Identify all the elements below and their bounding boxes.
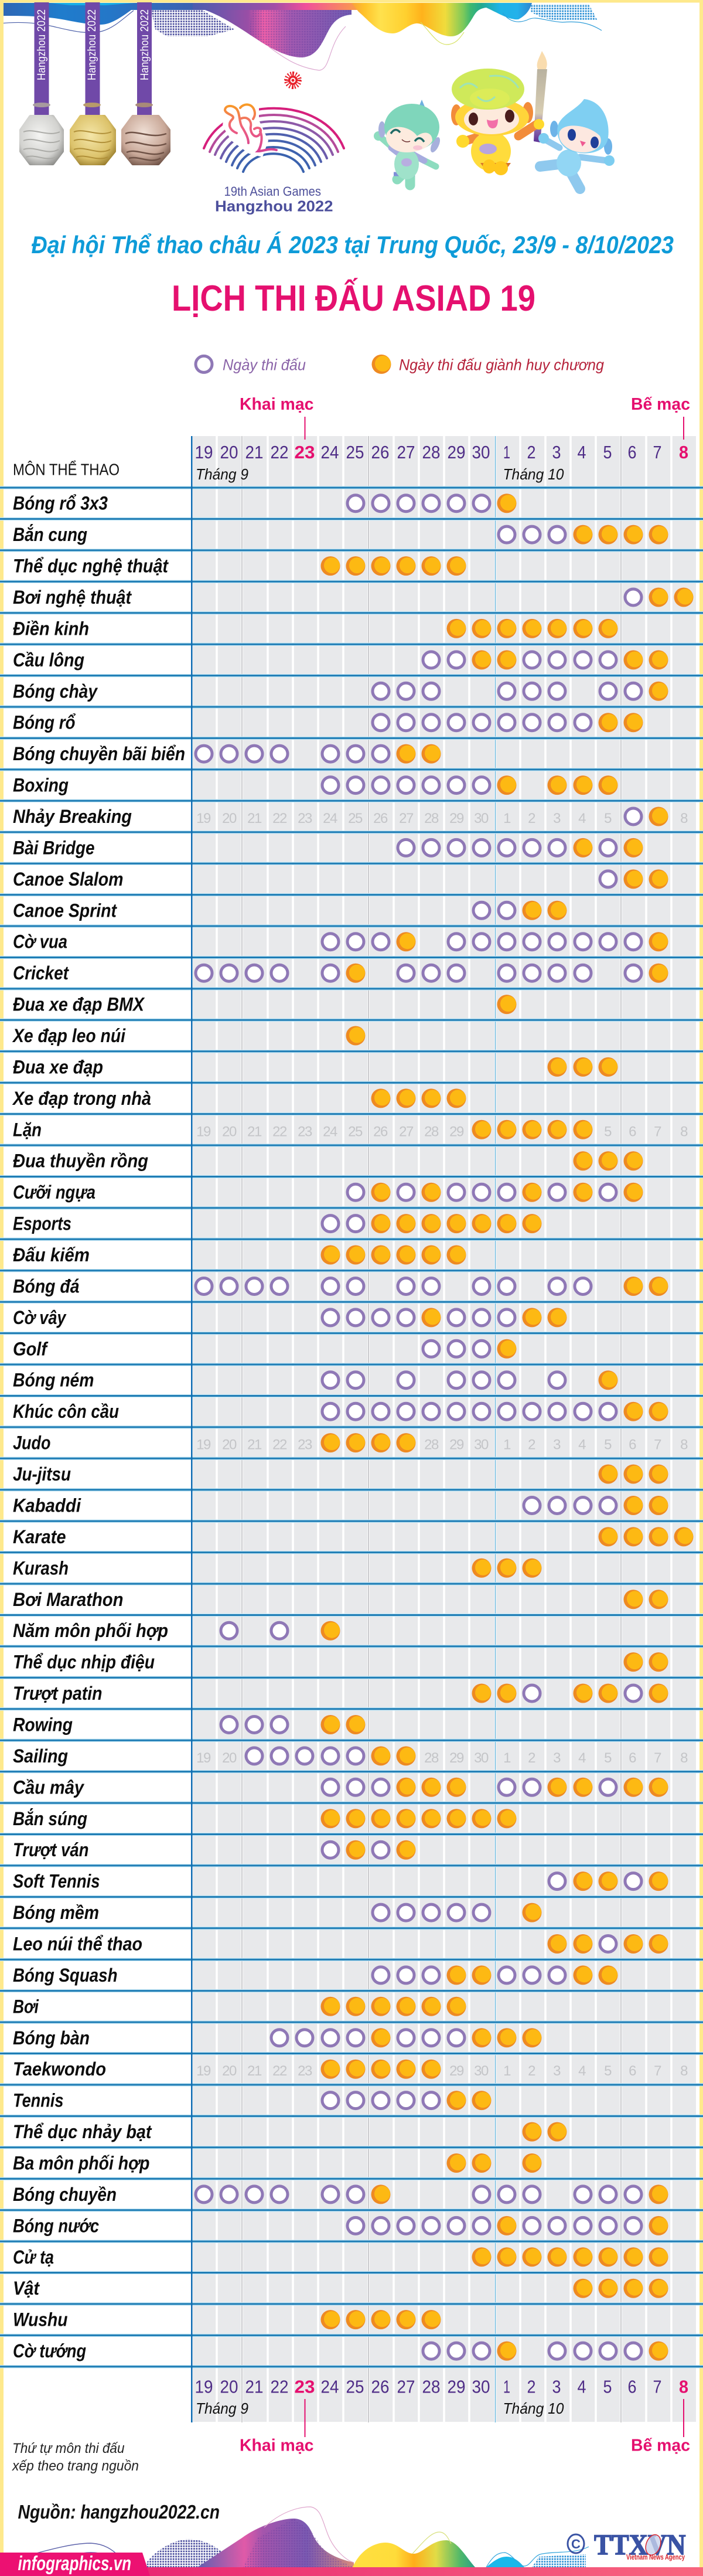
row: Judo: 4	[578, 1437, 586, 1453]
row: Nhảy Breaking: 22	[272, 811, 287, 826]
row: Bóng rổ 3x3: Bóng rổ 3x3	[13, 493, 108, 514]
row: Bóng chày	[13, 680, 668, 702]
marker: opening ceremony top: Khai mạc	[240, 395, 314, 414]
bottom date axis: 6	[628, 2377, 636, 2397]
row: Lặn: 6	[629, 1124, 636, 1139]
row: Xe đạp leo núi	[12, 1025, 365, 1046]
bottom date axis: 30	[472, 2377, 490, 2397]
row: Bóng chuyền: Bóng chuyền	[13, 2184, 117, 2205]
row: Nhảy Breaking: 21	[247, 811, 262, 826]
row: Sailing: 1	[503, 1750, 511, 1766]
row: Đua xe đạp BMX: Đua xe đạp BMX	[13, 994, 145, 1015]
row: Đấu kiếm	[13, 1244, 466, 1265]
row: Judo	[13, 1432, 688, 1454]
row: Thể dục nhảy bạt: Thể dục nhảy bạt	[13, 2121, 152, 2142]
row: Bắn súng	[13, 1808, 517, 1829]
row: Nhảy Breaking: 28	[424, 811, 439, 826]
mascots	[374, 51, 615, 189]
row: Cờ tướng	[13, 2340, 668, 2361]
row: Judo: Judo	[13, 1432, 50, 1454]
top date axis: 1	[503, 442, 510, 462]
Asian Games logo	[204, 103, 344, 172]
top date axis: 26	[371, 442, 389, 462]
row: Taekwondo: 21	[247, 2063, 262, 2079]
row: Thể dục nghệ thuật	[13, 556, 466, 577]
row: Sailing: 5	[604, 1750, 612, 1766]
logo caption: Hangzhou 2022	[215, 198, 333, 215]
mascot: yellow with torch	[451, 51, 547, 175]
legend: medal day: Ngày thi đấu giành huy chương	[399, 356, 604, 373]
row: Bơi nghệ thuật	[13, 587, 694, 608]
row: Sailing: Sailing	[13, 1745, 68, 1767]
top date axis: 22	[271, 442, 288, 462]
top date axis: Tháng 10	[503, 465, 564, 483]
row: Bắn cung	[13, 524, 668, 545]
row: Rowing	[13, 1714, 366, 1735]
row: Judo: 20	[222, 1437, 237, 1453]
row: Sailing: 3	[553, 1750, 561, 1766]
row: Judo: 6	[629, 1437, 636, 1453]
row: Thể dục nhảy bạt	[13, 2121, 567, 2142]
row: Kurash	[13, 1557, 541, 1578]
row: Năm môn phối hợp	[13, 1620, 340, 1641]
row: Taekwondo: 1	[503, 2063, 511, 2079]
bottom date axis: 7	[653, 2377, 662, 2397]
row: Esports: Esports	[13, 1213, 71, 1234]
row: Cờ tướng: Cờ tướng	[13, 2340, 86, 2361]
marker: opening ceremony bottom	[240, 2399, 314, 2455]
row: Taekwondo	[13, 2058, 688, 2080]
row: Lặn: 19	[196, 1124, 211, 1139]
top date axis: 20	[220, 442, 238, 462]
row: Sailing: 20	[222, 1750, 237, 1766]
marker: opening ceremony top	[240, 395, 314, 440]
row: Bơi	[13, 1996, 466, 2017]
row: Khúc côn cầu	[13, 1401, 668, 1422]
row: Judo: 19	[196, 1437, 211, 1453]
row: Cầu mây	[13, 1777, 668, 1798]
row: Cờ vua: Cờ vua	[13, 931, 67, 952]
row: Judo: 1	[503, 1437, 511, 1453]
row: Lặn: 21	[247, 1124, 262, 1139]
row: Lặn: 28	[424, 1124, 439, 1139]
row: Bóng chuyền	[13, 2184, 668, 2205]
row: Bóng ném: Bóng ném	[13, 1370, 94, 1391]
top date axis: 23	[294, 442, 315, 462]
row: Cờ vua	[13, 931, 668, 952]
row: Soft Tennis	[13, 1871, 668, 1892]
row: Bóng đá: Bóng đá	[13, 1275, 80, 1296]
row: Cưỡi ngựa: Cưỡi ngựa	[13, 1182, 95, 1203]
top date axis: 29	[448, 442, 465, 462]
bottom date axis	[194, 2377, 688, 2417]
row: Bóng Squash: Bóng Squash	[13, 1965, 117, 1986]
row: Nhảy Breaking: 30	[474, 811, 489, 826]
footnote: Thứ tự môn thi đấu	[12, 2441, 124, 2456]
row: Rowing: Rowing	[13, 1714, 73, 1735]
row: Bóng đá	[13, 1275, 668, 1296]
row: Bóng chày: Bóng chày	[13, 680, 98, 702]
row: Sailing: 4	[578, 1750, 586, 1766]
row: Taekwondo: 29	[449, 2063, 464, 2079]
row: Đấu kiếm: Đấu kiếm	[13, 1244, 90, 1265]
row: Nhảy Breaking: 5	[604, 811, 612, 826]
silver medal	[21, 2, 62, 164]
row: Bóng nước	[13, 2215, 668, 2236]
row: Nhảy Breaking: 23	[298, 811, 312, 826]
row: Bóng mềm	[13, 1902, 541, 1923]
row: Bóng rổ: Bóng rổ	[13, 712, 76, 733]
row: Judo: 21	[247, 1437, 262, 1453]
top date axis: 8	[679, 442, 688, 462]
mascot: green	[374, 100, 442, 185]
bottom date axis: 1	[503, 2377, 510, 2397]
legend: competition day: Ngày thi đấu	[223, 356, 306, 373]
gold medal: Hangzhou 2022	[86, 9, 98, 80]
bottom date axis: 27	[397, 2377, 415, 2397]
row: Leo núi thể thao	[13, 1933, 668, 1954]
row: Khúc côn cầu: Khúc côn cầu	[13, 1401, 119, 1422]
row: Bóng rổ	[13, 712, 643, 733]
row: Nhảy Breaking: 24	[323, 811, 337, 826]
row: Taekwondo: 3	[553, 2063, 561, 2079]
row: Ju-jitsu: Ju-jitsu	[13, 1464, 71, 1485]
row: Bơi Marathon: Bơi Marathon	[13, 1589, 123, 1610]
row: Trượt ván	[13, 1839, 416, 1860]
TTXVN logo: C	[571, 2537, 581, 2551]
row: Cầu mây: Cầu mây	[13, 1777, 85, 1798]
row: Taekwondo: 6	[629, 2063, 636, 2079]
silver medal: Hangzhou 2022	[36, 9, 48, 80]
row: Nhảy Breaking: 2	[528, 811, 535, 826]
row: Karate	[13, 1526, 694, 1547]
row: Golf	[13, 1338, 517, 1359]
row: Trượt patin	[13, 1683, 668, 1704]
icon: red sun emblem	[285, 72, 301, 89]
bottom date axis: 26	[371, 2377, 389, 2397]
row: Ba môn phối hợp: Ba môn phối hợp	[13, 2152, 150, 2173]
row: Xe đạp trong nhà: Xe đạp trong nhà	[12, 1088, 151, 1109]
row: Cử tạ: Cử tạ	[13, 2247, 54, 2268]
row: Nhảy Breaking: 27	[399, 811, 414, 826]
top date axis: 7	[653, 442, 662, 462]
row: Ba môn phối hợp	[13, 2152, 541, 2173]
row: Lặn: 20	[222, 1124, 237, 1139]
row: Canoe Slalom: Canoe Slalom	[13, 869, 123, 890]
marker: closing ceremony bottom	[631, 2399, 690, 2455]
row: Nhảy Breaking: 8	[680, 811, 688, 826]
row: Judo: 2	[528, 1437, 535, 1453]
footnote: xếp theo trang nguồn	[12, 2458, 139, 2474]
row: Nhảy Breaking: 4	[578, 811, 586, 826]
row: Nhảy Breaking: 26	[373, 811, 388, 826]
bottom date axis: 22	[271, 2377, 288, 2397]
row: Kabaddi	[13, 1495, 668, 1516]
title: LỊCH THI ĐẤU ASIAD 19	[172, 278, 535, 319]
row: Wushu: Wushu	[13, 2309, 68, 2330]
top date axis	[194, 442, 688, 483]
row: Sailing: 29	[449, 1750, 464, 1766]
row: Bóng bàn: Bóng bàn	[13, 2027, 90, 2048]
bronze medal	[123, 2, 169, 164]
marker: closing ceremony bottom: Bế mạc	[631, 2437, 690, 2455]
row: Canoe Sprint	[13, 900, 567, 921]
top date axis: 5	[603, 442, 612, 462]
row: Lặn: 24	[323, 1124, 337, 1139]
top date axis: 2	[527, 442, 535, 462]
row: Bơi nghệ thuật: Bơi nghệ thuật	[13, 587, 132, 608]
bottom date axis: 25	[346, 2377, 364, 2397]
footer bar	[0, 2567, 703, 2576]
row: Sailing: 30	[474, 1750, 489, 1766]
row: Soft Tennis: Soft Tennis	[13, 1871, 100, 1892]
row: Bơi Marathon	[13, 1589, 668, 1610]
top date axis: 3	[552, 442, 561, 462]
source: Nguồn: hangzhou2022.cn	[18, 2501, 220, 2523]
TTXVN logo: TTXVN	[594, 2528, 685, 2561]
top date axis: 4	[578, 442, 586, 462]
row: Lặn: 8	[680, 1124, 688, 1139]
row: Wushu	[13, 2309, 441, 2330]
row: Nhảy Breaking: 19	[196, 811, 211, 826]
row: Taekwondo: 22	[272, 2063, 287, 2079]
row: Điền kinh: Điền kinh	[13, 618, 89, 639]
row: Bóng chuyền bãi biển	[13, 743, 441, 764]
marker: opening ceremony bottom: Khai mạc	[240, 2437, 314, 2455]
row: Kurash: Kurash	[13, 1557, 69, 1578]
row: Judo: 23	[298, 1437, 312, 1453]
row: Nhảy Breaking: 25	[348, 811, 363, 826]
row: Lặn	[13, 1119, 688, 1140]
row: Judo: 28	[424, 1437, 439, 1453]
TTXVN logo	[568, 2528, 685, 2561]
row: Thể dục nhịp điệu: Thể dục nhịp điệu	[13, 1652, 155, 1673]
bottom date axis: 5	[603, 2377, 612, 2397]
bottom date axis: 24	[321, 2377, 339, 2397]
top date axis: Tháng 9	[196, 465, 248, 483]
top date axis: 28	[422, 442, 441, 462]
row: Tennis	[13, 2090, 491, 2111]
row: Xe đạp trong nhà	[12, 1088, 466, 1109]
row: Judo: 3	[553, 1437, 561, 1453]
gold medal	[71, 2, 114, 164]
row: Bóng mềm: Bóng mềm	[13, 1902, 99, 1923]
row: Judo: 8	[680, 1437, 688, 1453]
row: Đua thuyền rồng	[13, 1151, 643, 1172]
row: Cờ vây	[13, 1307, 567, 1328]
medals on ribbons	[21, 2, 169, 164]
row: Đua xe đạp	[13, 1056, 617, 1077]
bottom date axis: 21	[245, 2377, 264, 2397]
top date axis: 27	[397, 442, 415, 462]
row: Bài Bridge	[13, 837, 643, 858]
bronze medal: Hangzhou 2022	[139, 9, 151, 80]
row: Lặn: 25	[348, 1124, 363, 1139]
row: Boxing: Boxing	[13, 775, 69, 796]
row: Bóng Squash	[13, 1965, 617, 1986]
top date axis: 30	[472, 442, 490, 462]
row: Cưỡi ngựa	[13, 1182, 643, 1203]
row: Sailing: 28	[424, 1750, 439, 1766]
row: Nhảy Breaking	[13, 806, 688, 827]
row: Kabaddi: Kabaddi	[13, 1495, 81, 1516]
row: Sailing: 2	[528, 1750, 535, 1766]
row: Thể dục nhịp điệu	[13, 1652, 668, 1673]
row: Cricket	[13, 962, 668, 984]
row: Taekwondo: 8	[680, 2063, 688, 2079]
row: Sailing	[13, 1745, 688, 1767]
row: Judo: 7	[654, 1437, 661, 1453]
row: Bóng chuyền bãi biển: Bóng chuyền bãi biển	[13, 743, 185, 764]
row: Lặn: 7	[654, 1124, 661, 1139]
row: Cầu lông	[13, 649, 668, 671]
bottom date axis: Tháng 9	[196, 2400, 248, 2417]
footnote	[12, 2441, 139, 2474]
marker: closing ceremony top: Bế mạc	[631, 395, 690, 414]
row: Taekwondo: 2	[528, 2063, 535, 2079]
bottom date axis: 19	[194, 2377, 213, 2397]
row: Đua thuyền rồng: Đua thuyền rồng	[13, 1151, 148, 1172]
bottom date axis: 8	[679, 2377, 688, 2397]
bottom date axis: 3	[552, 2377, 561, 2397]
row: Lặn: 29	[449, 1124, 464, 1139]
row: Nhảy Breaking: 20	[222, 811, 237, 826]
bottom date axis: 20	[220, 2377, 238, 2397]
bottom date axis: 2	[527, 2377, 535, 2397]
row: Judo: 22	[272, 1437, 287, 1453]
row: Judo: 5	[604, 1437, 612, 1453]
row: Sailing: 6	[629, 1750, 636, 1766]
row: Bơi: Bơi	[13, 1996, 39, 2017]
bottom date axis: 28	[422, 2377, 441, 2397]
row: Bắn súng: Bắn súng	[13, 1808, 87, 1829]
row: Lặn: 26	[373, 1124, 388, 1139]
row: Bóng nước: Bóng nước	[13, 2215, 99, 2236]
row: Lặn: Lặn	[13, 1119, 42, 1140]
row: Esports	[13, 1213, 541, 1234]
row: Tennis: Tennis	[13, 2090, 63, 2111]
row: Taekwondo: 4	[578, 2063, 586, 2079]
row: Nhảy Breaking: 29	[449, 811, 464, 826]
top date axis: 21	[245, 442, 264, 462]
row: Canoe Slalom	[13, 869, 668, 890]
row: Đua xe đạp: Đua xe đạp	[13, 1056, 103, 1077]
bottom date axis: 29	[448, 2377, 465, 2397]
row: Bài Bridge: Bài Bridge	[13, 837, 95, 858]
schedule table	[0, 436, 703, 2422]
row: Bắn cung: Bắn cung	[13, 524, 87, 545]
row: Bóng rổ 3x3	[13, 493, 517, 514]
footer tag: infographics.vn: infographics.vn	[18, 2553, 131, 2575]
row: Điền kinh	[13, 618, 617, 639]
row: Judo: 30	[474, 1437, 489, 1453]
row: Nhảy Breaking: 1	[503, 811, 511, 826]
row: Lặn: 27	[399, 1124, 414, 1139]
row: Karate: Karate	[13, 1526, 66, 1547]
row: Thể dục nghệ thuật: Thể dục nghệ thuật	[13, 556, 169, 577]
mascot: blue	[538, 99, 615, 189]
top date axis: 6	[628, 442, 636, 462]
logo caption: 19th Asian Games	[224, 184, 321, 199]
row: Cầu lông: Cầu lông	[13, 649, 84, 671]
logo caption	[215, 184, 333, 215]
legend	[196, 355, 604, 374]
row: Taekwondo: 19	[196, 2063, 211, 2079]
row: Lặn: 23	[298, 1124, 312, 1139]
marker: closing ceremony top	[631, 395, 690, 440]
row: Canoe Sprint: Canoe Sprint	[13, 900, 117, 921]
top rainbow ribbon band	[0, 3, 602, 70]
bottom date axis: 23	[294, 2377, 315, 2397]
row: Boxing	[13, 775, 617, 796]
row: Đua xe đạp BMX	[13, 994, 517, 1015]
row: Golf: Golf	[13, 1338, 49, 1359]
row: Cricket: Cricket	[13, 962, 69, 984]
row: Sailing: 7	[654, 1750, 661, 1766]
row: Judo: 29	[449, 1437, 464, 1453]
row: Cờ vây: Cờ vây	[13, 1307, 67, 1328]
row: Vật: Vật	[13, 2278, 40, 2299]
row: Taekwondo: Taekwondo	[13, 2058, 106, 2080]
row: Bóng ném	[13, 1370, 617, 1391]
row: Leo núi thể thao: Leo núi thể thao	[13, 1933, 142, 1954]
bottom rainbow mountains	[32, 2507, 589, 2567]
row: Taekwondo: 7	[654, 2063, 661, 2079]
row: Năm môn phối hợp: Năm môn phối hợp	[13, 1620, 168, 1641]
row: Taekwondo: 30	[474, 2063, 489, 2079]
row: Trượt patin: Trượt patin	[13, 1683, 102, 1704]
bottom date axis: 4	[578, 2377, 586, 2397]
row: Cử tạ	[13, 2247, 668, 2268]
row: Bóng bàn	[13, 2027, 541, 2048]
top date axis: 24	[321, 442, 339, 462]
row: Lặn: 5	[604, 1124, 612, 1139]
bottom date axis: Tháng 10	[503, 2400, 564, 2417]
row: Sailing: 19	[196, 1750, 211, 1766]
row: Ju-jitsu	[13, 1464, 668, 1485]
row: Trượt ván: Trượt ván	[13, 1839, 89, 1860]
row: Xe đạp leo núi: Xe đạp leo núi	[12, 1025, 126, 1046]
row: Taekwondo: 23	[298, 2063, 312, 2079]
row: Taekwondo: 20	[222, 2063, 237, 2079]
row: Taekwondo: 5	[604, 2063, 612, 2079]
column heading: sport: MÔN THỂ THAO	[13, 461, 120, 479]
row: Lặn: 22	[272, 1124, 287, 1139]
row: Sailing: 8	[680, 1750, 688, 1766]
row: Vật	[13, 2278, 668, 2299]
top date axis: 25	[346, 442, 364, 462]
row: Nhảy Breaking: 3	[553, 811, 561, 826]
top date axis: 19	[194, 442, 213, 462]
row: Nhảy Breaking: Nhảy Breaking	[13, 806, 132, 827]
